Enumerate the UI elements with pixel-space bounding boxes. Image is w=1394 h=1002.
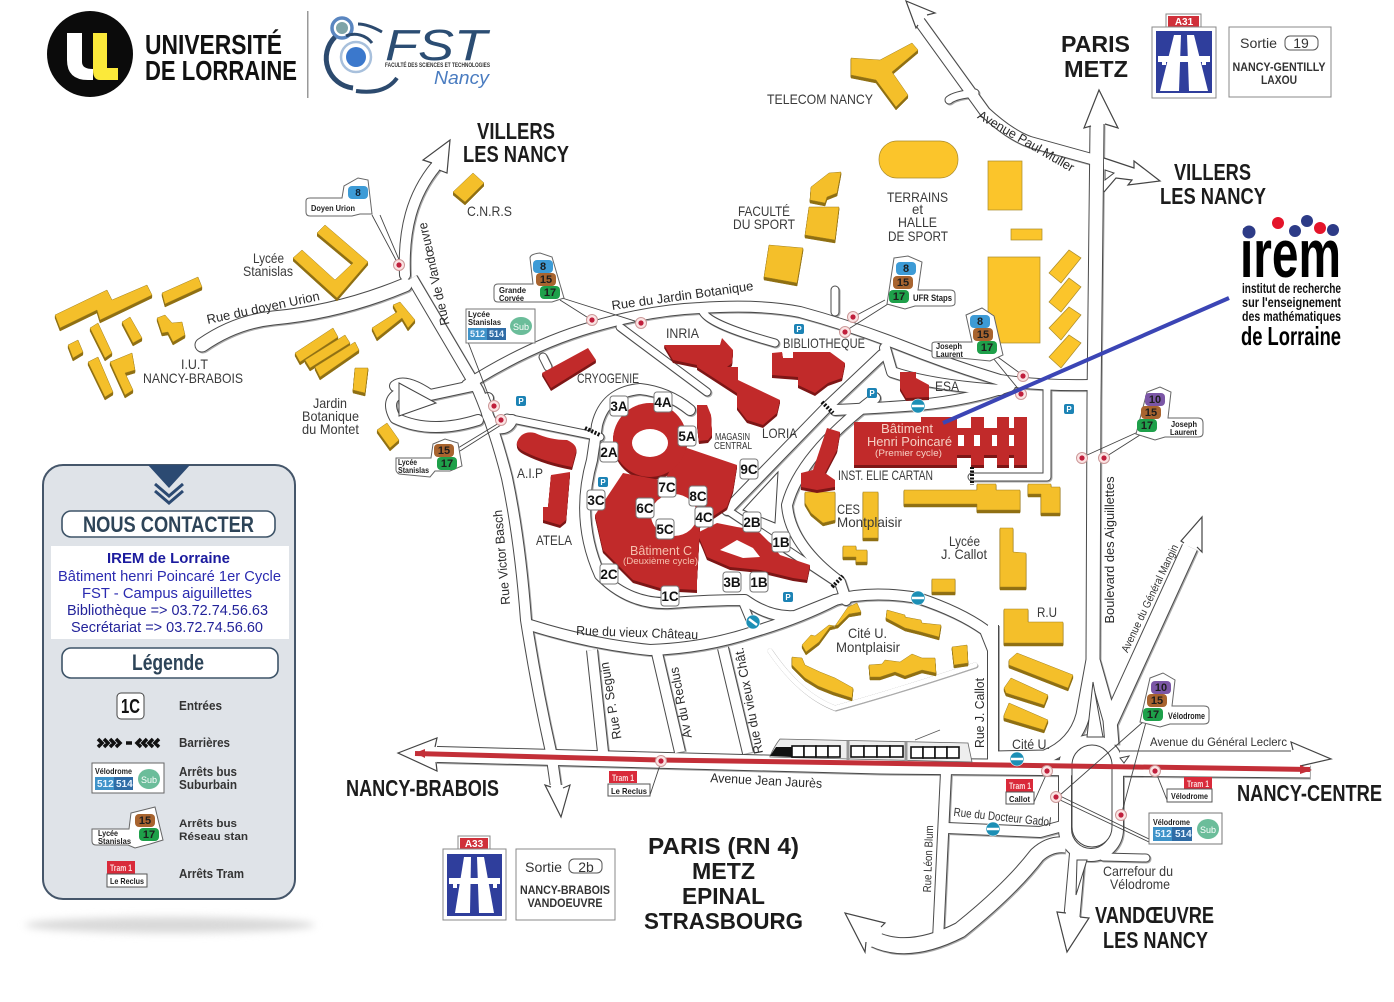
arrow: south-west boulevard — [845, 913, 885, 952]
stop: Velodrome suburban bus: Vélodrome — [1153, 817, 1190, 827]
stop: Joseph Laurent (east): Laurent — [1170, 427, 1197, 437]
legend: stan bus: 17 — [143, 829, 155, 841]
logo: FST Nancy: FACULTÉ DES SCIENCES ET TECHNOLOGIES — [385, 61, 490, 69]
direction headings: NANCY-BRABOIS — [346, 775, 499, 801]
building labels: LORIA — [762, 425, 798, 441]
stop: Lycee Stanislas network bus: Stanislas — [398, 465, 429, 475]
red building: Institut Elie Cartan — [801, 428, 840, 490]
tram stop: Callot: Callot — [1009, 794, 1030, 804]
stop: Doyen Urion: Doyen Urion — [311, 203, 355, 213]
heading: nous contacter: NOUS CONTACTER — [83, 512, 254, 537]
street labels: Rue de Vandœuvre — [415, 221, 452, 327]
street labels: Rue P. Seguin — [597, 661, 624, 740]
street labels: Rue du doyen Urion — [205, 288, 321, 327]
street labels: Boulevard des Aiguillettes — [1102, 476, 1117, 624]
arrow: avenue du General Mangin — [1181, 517, 1202, 552]
building labels: TELECOM NANCY — [767, 91, 874, 107]
arrow: Villers les Nancy (east) — [1104, 158, 1160, 192]
building labels: A.I.P — [517, 465, 543, 481]
arrow: Paris Metz — [1084, 90, 1118, 128]
building labels: Vélodrome — [1110, 876, 1170, 892]
building labels: CENTRAL — [714, 441, 752, 452]
legend: entrances: Entrées — [179, 698, 222, 713]
yellow buildings: Lycee Stanislas and Jardin Botanique — [293, 173, 484, 448]
direction headings: VILLERS — [477, 118, 555, 144]
building labels: Botanique — [302, 408, 359, 424]
exit panel 2b: Sortie — [525, 859, 562, 875]
stop: Joseph Laurent (east): Joseph — [1171, 419, 1197, 429]
tram stop: Le Reclus — [608, 771, 650, 796]
stop: Doyen Urion — [306, 178, 372, 216]
building labels: et — [912, 201, 923, 217]
stop: Lycee Stanislas suburban bus: Sub — [513, 322, 529, 332]
legend: suburban bus: 514 — [116, 779, 133, 790]
stop: Joseph Laurent (north) — [932, 308, 1003, 361]
logo: irem: institut de recherche — [1242, 280, 1341, 296]
street labels: Rue Léon Blum — [922, 825, 936, 893]
street labels: Avenue Jean Jaurès — [710, 770, 823, 791]
red building: INRIA and LORIA — [664, 338, 780, 425]
parking icons: P — [518, 397, 524, 406]
motorway sign A31 — [1152, 14, 1216, 98]
road islands — [399, 170, 1129, 895]
stop: Lycee Stanislas suburban bus: Stanislas — [468, 317, 501, 327]
exit panel 19 — [1229, 27, 1331, 97]
heading: legende: Légende — [132, 650, 204, 675]
one-way circles — [746, 399, 1024, 836]
barriers — [585, 402, 972, 587]
exit panel 19: LAXOU — [1261, 73, 1297, 87]
building labels: C.N.R.S — [467, 203, 512, 219]
stop: Joseph Laurent (east): 17 — [1141, 420, 1153, 432]
tram stop: Velodrome: Vélodrome — [1171, 791, 1208, 801]
building labels: INST. ELIE CARTAN — [838, 467, 933, 483]
direction headings: VILLERS — [1174, 159, 1251, 185]
tram stop: Velodrome: Tram 1 — [1187, 779, 1210, 790]
building labels: J. Callot — [941, 546, 987, 562]
building labels: CRYOGENIE — [577, 370, 639, 386]
stop: Lycee Stanislas suburban bus — [466, 309, 535, 343]
building entrance markers: 3A — [610, 399, 628, 414]
legend: tram — [107, 861, 244, 887]
stop: Velodrome suburban bus — [1149, 813, 1222, 844]
contact details: IREM de Lorraine — [107, 550, 230, 567]
motorway sign A33 — [443, 836, 506, 920]
stop: Lycee Stanislas suburban bus: 512 — [470, 329, 485, 339]
stop: Grande Corvee: Corvée — [499, 293, 524, 303]
pointer lines for stops — [372, 215, 1167, 842]
tram stop: Le Reclus: Le Reclus — [611, 786, 647, 796]
legend: stan bus: Stanislas — [98, 836, 131, 846]
yellow buildings: IUT Nancy-Brabois — [55, 277, 202, 397]
direction headings: VANDŒUVRE — [1095, 902, 1214, 928]
logo: FST Nancy: Nancy — [434, 68, 490, 88]
legend: stan bus: 15 — [139, 815, 151, 827]
red building: Magasin central — [697, 405, 712, 441]
building entrance markers: 4C — [695, 510, 713, 525]
logo: irem: irem — [1240, 216, 1341, 292]
building labels: Lycée — [949, 533, 980, 549]
tram stop: Callot: Tram 1 — [1009, 781, 1032, 792]
exit panel 19: 19 — [1293, 35, 1309, 51]
building labels: Montplaisir — [836, 639, 900, 655]
legend: entrances — [117, 693, 222, 719]
heading: legende — [62, 648, 278, 678]
building labels: Cité U. — [848, 625, 887, 641]
building labels: Cité U. — [1012, 736, 1050, 752]
contact details: FST - Campus aiguillettes — [82, 586, 252, 602]
direction headings: METZ — [692, 858, 755, 884]
direction headings: STRASBOURG — [644, 908, 803, 934]
legend panel — [43, 465, 295, 899]
arrow: south Victor Basch — [545, 785, 570, 817]
stop: Grande Corvee: 17 — [544, 287, 556, 299]
stop: Grande Corvee: Grande — [499, 285, 526, 295]
street labels: Rue du vieux Chât. — [731, 646, 766, 755]
stop: Joseph Laurent (east): 15 — [1145, 407, 1157, 419]
direction headings: LES NANCY — [1160, 183, 1266, 209]
arrow: north avenue Paul Muller — [906, 1, 935, 30]
street labels: Avenue du Général Leclerc — [1150, 735, 1287, 749]
arrow: Vandoeuvre — [1057, 912, 1089, 952]
building labels: BIBLIOTHEQUE — [783, 335, 865, 351]
legend: tram: Arrêts Tram — [179, 866, 244, 881]
road network casing — [202, 22, 1310, 946]
building entrance markers: 7C — [658, 480, 676, 495]
stop: Joseph Laurent (north): Joseph — [936, 341, 962, 351]
stop: UFR Staps: 8 — [903, 263, 909, 275]
legend: barriers: Barrières — [179, 735, 230, 750]
contact details — [51, 546, 289, 639]
legend: stan bus: Arrêts bus — [179, 818, 237, 830]
legend: suburban bus: Sub — [141, 775, 157, 785]
stop: Velodrome suburban bus: Sub — [1200, 825, 1216, 835]
legend: stan bus — [92, 807, 248, 848]
red building: A.I.P — [517, 432, 576, 467]
red building: Batiment C — [595, 403, 810, 590]
building entrance markers: 5A — [678, 429, 696, 444]
stop: Grande Corvee: 8 — [540, 261, 546, 273]
legend: stan bus: Lycée — [98, 828, 118, 838]
motorway sign A33: A33 — [465, 839, 484, 850]
street labels: Rue du Docteur Gadol — [953, 805, 1052, 829]
building labels: R.U — [1037, 604, 1057, 620]
stop: Grande Corvee — [494, 253, 564, 303]
arrow: Villers les Nancy (west) — [423, 140, 450, 173]
direction headings: EPINAL — [682, 883, 765, 909]
building entrance markers: 5C — [656, 522, 674, 537]
building labels: Jardin — [313, 395, 347, 411]
logo: irem: de Lorraine — [1241, 321, 1341, 351]
tram vehicle — [770, 730, 972, 762]
exit panel 2b: VANDOEUVRE — [528, 896, 602, 910]
building labels: Lycée — [253, 250, 284, 266]
stop: Joseph Laurent (north): 15 — [977, 329, 989, 341]
stop: Joseph Laurent (east): 10 — [1149, 394, 1161, 406]
street labels — [205, 107, 1287, 893]
direction headings: PARIS — [1061, 31, 1130, 57]
tram stop: Velodrome — [1167, 777, 1212, 802]
stop: Velodrome network bus: Vélodrome — [1168, 711, 1205, 722]
logo divider — [307, 11, 308, 98]
direction headings: METZ — [1064, 56, 1128, 82]
exit panel 19: Sortie — [1240, 35, 1277, 51]
red building: Batiment Henri Poincare: Bâtiment — [881, 421, 933, 436]
legend: suburban bus: Vélodrome — [95, 766, 132, 776]
road network surface — [202, 22, 1310, 946]
red building: Bibliotheque — [772, 352, 845, 393]
parking icons: P — [785, 593, 791, 602]
contact details: Bâtiment henri Poincaré 1er Cycle — [58, 569, 281, 585]
stop: Lycee Stanislas suburban bus: 514 — [489, 329, 504, 339]
parking icons: P — [796, 325, 802, 334]
yellow sports grounds — [879, 141, 1081, 368]
legend panel shadow — [25, 917, 315, 933]
motorway sign A31: A31 — [1175, 17, 1194, 28]
building labels: ESA — [935, 378, 960, 394]
street labels: Avenue du Général Mangin — [1119, 543, 1181, 655]
street labels: Rue du vieux Château — [576, 623, 698, 642]
exit panel 2b: 2b — [578, 859, 594, 875]
building labels — [143, 91, 1173, 892]
building entrance markers: 1B — [772, 535, 790, 550]
street labels: Avenue Paul Muller — [975, 107, 1078, 175]
arrow: Nancy-Centre — [1291, 742, 1331, 772]
street labels: Rue Victor Basch — [490, 509, 513, 605]
legend: tram: Tram 1 — [110, 863, 133, 874]
building labels: Montplaisir — [837, 514, 902, 530]
building entrance markers: 4A — [654, 395, 672, 410]
stop: Lycee Stanislas network bus: Lycée — [398, 457, 417, 467]
yellow buildings: Lycee J. Callot, CES, R.U, Cite U — [792, 484, 1073, 730]
building labels: ATELA — [536, 532, 573, 548]
logo: FST Nancy — [326, 18, 491, 92]
stop: Velodrome network bus: 17 — [1147, 709, 1159, 721]
logo: irem: des mathématiques — [1242, 308, 1341, 324]
red building: Batiment Henri Poincare — [854, 417, 1027, 465]
legend: suburban bus: Suburbain — [179, 777, 237, 792]
logo: Universite de Lorraine — [47, 11, 297, 97]
red building: Cryogenie — [542, 348, 596, 388]
legend: tram: Le Reclus — [110, 876, 144, 886]
building entrance markers: 6C — [636, 501, 654, 516]
building labels: du Montet — [302, 421, 359, 437]
logo: FST Nancy: FST — [385, 21, 491, 70]
legend: entrances: 1C — [121, 696, 140, 718]
building labels: Carrefour du — [1103, 863, 1173, 879]
building labels: MAGASIN — [715, 432, 750, 443]
street labels: Av du Reclus — [666, 666, 695, 740]
parking icons: P — [600, 478, 606, 487]
building entrance markers: 2C — [600, 567, 618, 582]
chevron icon — [148, 465, 190, 503]
legend: suburban bus — [92, 763, 237, 793]
legend: stan bus: Réseau stan — [179, 831, 248, 843]
red building: Batiment Henri Poincare: (Premier cycle) — [875, 448, 942, 458]
building entrance markers: 3B — [723, 575, 741, 590]
contact details: Secrétariat => 03.72.74.56.60 — [71, 620, 263, 636]
building labels: NANCY-BRABOIS — [143, 370, 243, 386]
arrow: Nancy-Brabois — [398, 738, 437, 771]
label: Batiment C — [623, 543, 698, 566]
stop: Velodrome network bus — [1140, 673, 1209, 727]
stop: UFR Staps: UFR Staps — [913, 293, 952, 304]
building entrance markers: 2B — [743, 515, 761, 530]
stop markers — [394, 260, 1160, 820]
building labels: HALLE — [898, 214, 937, 230]
building labels: CES — [837, 501, 860, 517]
red building: Batiment Henri Poincare: Henri Poincaré — [867, 434, 952, 449]
stop: Joseph Laurent (north): Laurent — [936, 349, 963, 359]
stop: Velodrome suburban bus: 514 — [1175, 829, 1192, 840]
exit panel 2b — [516, 849, 615, 920]
stop: Doyen Urion: 8 — [355, 188, 361, 199]
red building: ATELA — [543, 472, 570, 525]
direction headings: LES NANCY — [1103, 927, 1208, 953]
stop: Joseph Laurent (north): 8 — [977, 316, 983, 328]
label: Batiment C: Bâtiment C — [630, 543, 692, 558]
logo: irem — [1240, 215, 1341, 351]
exit panel 19: NANCY-GENTILLY — [1232, 60, 1326, 74]
yellow buildings: Telecom Nancy and Faculte du Sport — [764, 43, 918, 283]
logo: Universite de Lorraine: UNIVERSITÉ — [145, 29, 282, 60]
stop: UFR Staps: 17 — [893, 291, 905, 303]
stop: UFR Staps — [887, 256, 955, 309]
building labels: TERRAINS — [887, 189, 948, 205]
direction headings: LES NANCY — [463, 141, 569, 167]
logo: irem: sur l'enseignement — [1242, 294, 1341, 310]
street labels: Rue du Jardin Botanique — [611, 278, 754, 313]
stop: Velodrome network bus: 15 — [1151, 695, 1163, 707]
parking icons: P — [1066, 405, 1072, 414]
building entrance markers: 3C — [587, 493, 605, 508]
blue pointer from irem logo to building — [943, 298, 1229, 423]
tram stop: Callot — [1006, 779, 1034, 804]
parking icons: P — [869, 389, 875, 398]
building entrance markers: 2A — [600, 445, 618, 460]
direction headings: PARIS (RN 4) — [648, 833, 799, 859]
tram stop: Le Reclus: Tram 1 — [612, 773, 635, 784]
stop: Lycee Stanislas network bus: 17 — [441, 458, 453, 470]
stop: UFR Staps: 15 — [897, 277, 909, 289]
contact details: Bibliothèque => 03.72.74.56.63 — [67, 603, 268, 619]
building labels: DE SPORT — [888, 228, 948, 244]
building entrance markers — [587, 392, 790, 606]
exit panel 2b: NANCY-BRABOIS — [520, 883, 610, 897]
logo: Universite de Lorraine: DE LORRAINE — [145, 55, 297, 86]
stop: Lycee Stanislas network bus: 15 — [438, 445, 450, 457]
stop: Joseph Laurent (north): 17 — [981, 342, 993, 354]
tram line — [415, 749, 1312, 774]
street labels: Rue J. Callot — [972, 678, 987, 748]
building labels: INRIA — [666, 325, 700, 341]
label: Batiment C: (Deuxième cycle) — [623, 556, 698, 566]
stop: Lycee Stanislas suburban bus: Lycée — [468, 309, 490, 319]
stop: Velodrome network bus: 10 — [1155, 682, 1167, 694]
building labels: DU SPORT — [733, 216, 795, 232]
red building: ESA — [900, 372, 929, 398]
stop: Lycee Stanislas network bus — [396, 439, 462, 477]
building entrance markers: 8C — [689, 489, 707, 504]
legend: suburban bus: 512 — [97, 779, 114, 790]
building labels: FACULTÉ — [738, 203, 790, 219]
stop: Velodrome suburban bus: 512 — [1155, 829, 1172, 840]
legend: suburban bus: Arrêts bus — [179, 764, 237, 779]
legend: barriers — [98, 735, 230, 750]
building entrance markers: 1C — [661, 589, 679, 604]
parking icons — [516, 324, 1074, 602]
stop: Joseph Laurent (east) — [1136, 387, 1203, 440]
building entrance markers: 9C — [740, 462, 758, 477]
building labels: I.U.T — [181, 356, 208, 372]
building entrance markers: 1B — [750, 575, 768, 590]
direction headings — [346, 31, 1382, 953]
building labels: Stanislas — [243, 263, 293, 279]
stop: Grande Corvee: 15 — [540, 274, 552, 286]
